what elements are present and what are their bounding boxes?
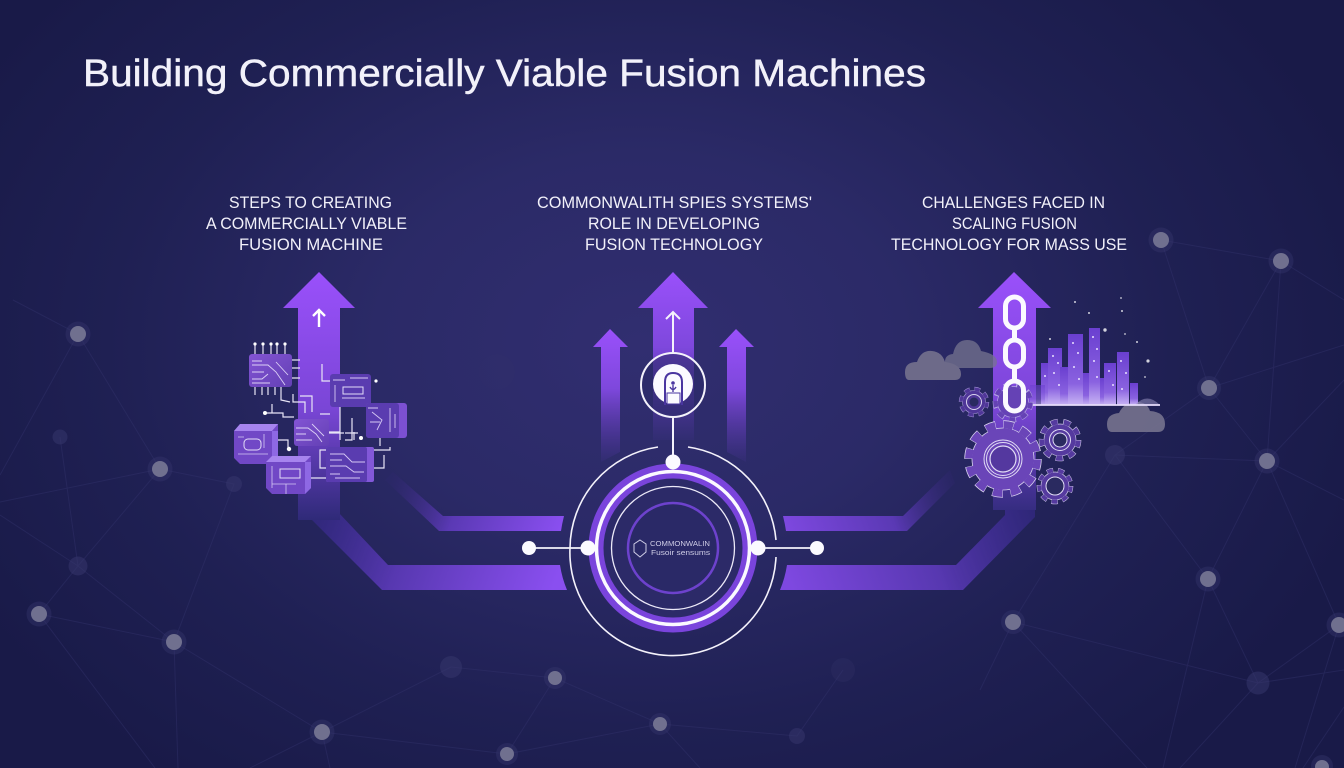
heading: steps: FUSION MACHINE [239,235,383,254]
icon: clouds [905,340,1165,432]
gear large [968,424,1038,494]
gear lower right [1039,470,1071,502]
inner purple ring [628,503,718,593]
background network [0,228,1344,768]
heading: role [537,193,812,254]
hub logo [634,540,646,557]
purple ring [596,471,750,625]
heading: steps: A COMMERCIALLY VIABLE [206,214,407,233]
inner thin ring [612,486,734,610]
hub label [650,539,710,557]
heading: role: ROLE IN DEVELOPING [588,214,760,233]
icon: gears [961,384,1078,502]
heading: role: FUSION TECHNOLOGY [585,235,763,254]
heading: steps: STEPS TO CREATING [229,193,392,212]
chip 4 [294,419,329,446]
gear upper left [961,389,987,415]
hub label: Fusoir sensums [651,548,710,557]
chip 3 [366,403,407,438]
chip 7 [266,456,311,494]
heading: role: COMMONWALITH SPIES SYSTEMS' [537,193,812,212]
icon: lab badge [641,312,705,456]
white ring [596,472,750,624]
title: Building Commercially Viable Fusion Machines [83,53,926,95]
gear upper middle [995,384,1031,420]
chip 6 [234,424,278,464]
heading: challenges: SCALING FUSION [952,214,1077,233]
icon: chain [1006,297,1024,411]
outer ring [570,447,776,656]
connector bands left [307,472,567,590]
arrow: centre right [719,329,754,462]
heading: challenges: CHALLENGES FACED IN [922,193,1105,212]
gear medium right [1042,422,1078,458]
chip 5 [326,447,374,482]
connector bands right [780,470,1035,590]
arrow: centre left [593,329,628,462]
central hub [522,447,824,656]
arrow: right [978,272,1051,510]
chip 2 [330,374,371,407]
hub label: COMMONWALIN [650,539,710,548]
connector lines and nodes [522,454,824,556]
icon: small up arrow [313,310,325,327]
heading: challenges [891,193,1127,254]
icon: circuit chips [234,342,407,494]
chip 1 [249,354,292,387]
icon: city skyline [1030,297,1160,405]
arrow: left [283,272,355,520]
arrows: centre group [593,272,754,462]
arrow: centre main [638,272,708,440]
heading: challenges: TECHNOLOGY FOR MASS USE [891,235,1127,254]
heading: steps [206,193,407,254]
